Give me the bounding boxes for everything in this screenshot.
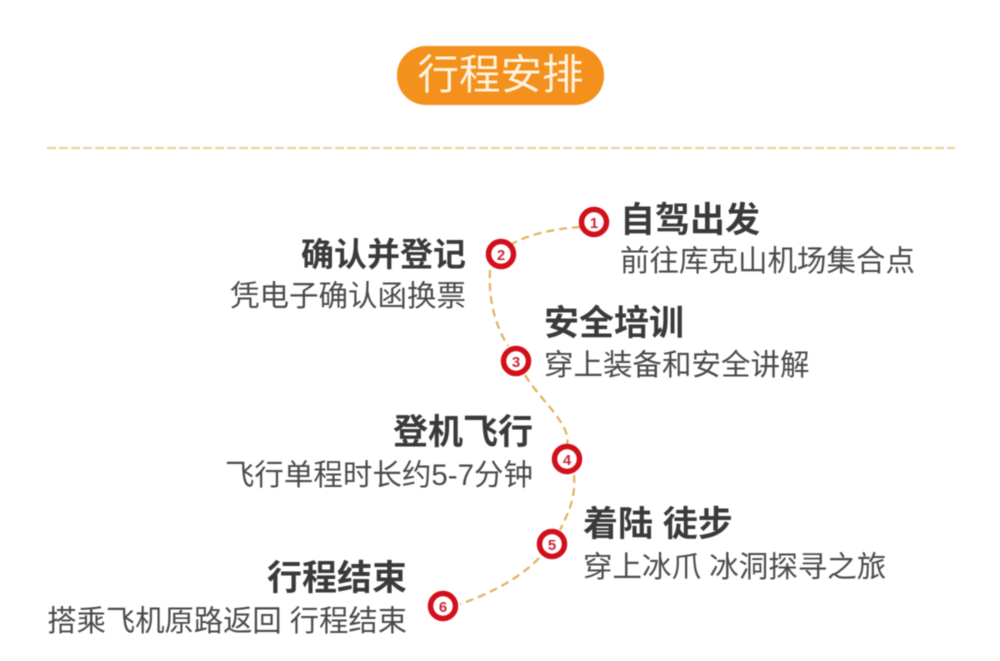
step 2 description: 凭电子确认函换票 xyxy=(230,280,466,313)
step 5 heading: 着陆 徒步 xyxy=(583,505,733,544)
step 2 heading: 确认并登记 xyxy=(301,236,466,273)
marker 5 xyxy=(540,532,564,556)
marker 1: 1 xyxy=(590,215,598,232)
step markers xyxy=(430,210,606,618)
marker 6 xyxy=(430,594,456,618)
marker 3 xyxy=(504,348,528,374)
step 6 heading: 行程结束 xyxy=(267,559,407,598)
marker 4: 4 xyxy=(563,452,572,469)
step 4 description: 飞行单程时长约5-7分钟 xyxy=(225,459,533,492)
marker 4 xyxy=(554,446,580,472)
step 4 heading: 登机飞行 xyxy=(393,413,533,452)
marker 5: 5 xyxy=(548,537,556,554)
step 1 heading: 自驾出发 xyxy=(620,201,760,240)
step 6 description: 搭乘飞机原路返回 行程结束 xyxy=(47,605,407,638)
step 3 description: 穿上装备和安全讲解 xyxy=(544,349,810,382)
dashed route xyxy=(460,227,580,604)
marker 2: 2 xyxy=(497,247,505,264)
marker 3: 3 xyxy=(512,354,520,371)
step 3 heading: 安全培训 xyxy=(544,304,684,343)
title text: 行程安排 xyxy=(417,51,584,98)
title badge xyxy=(397,46,604,105)
step 1 description: 前往库克山机场集合点 xyxy=(620,245,915,278)
marker 2 xyxy=(488,242,514,266)
marker 6: 6 xyxy=(439,599,447,616)
step 5 description: 穿上冰爪 冰洞探寻之旅 xyxy=(583,551,886,584)
marker 1 xyxy=(582,210,606,234)
